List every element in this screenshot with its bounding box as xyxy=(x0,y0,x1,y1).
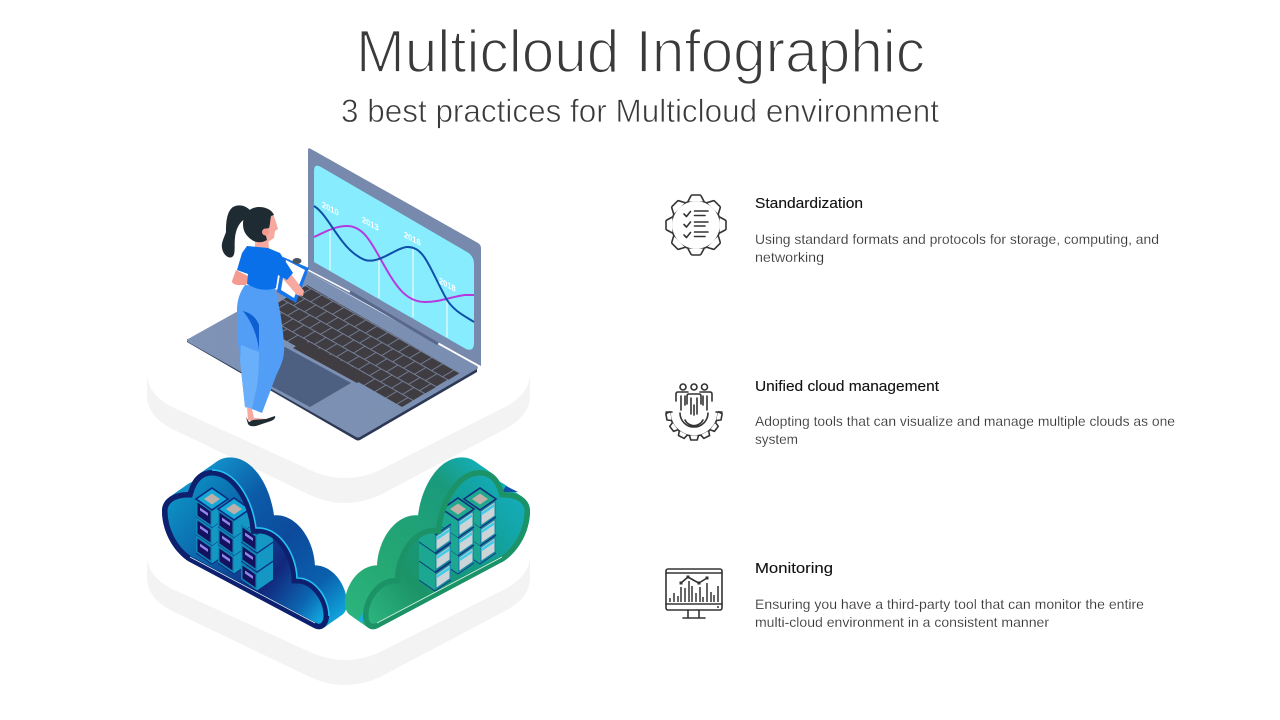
green cloud xyxy=(345,457,530,629)
blue cloud xyxy=(162,457,347,629)
upper platform xyxy=(147,373,530,503)
blue cloud rim xyxy=(162,470,329,629)
lower platform xyxy=(147,555,530,685)
blue cloud extrusion xyxy=(164,457,347,628)
chart year labels: 2010 xyxy=(322,199,339,218)
chart year labels: 2013 xyxy=(362,214,379,233)
heading: Unified cloud management xyxy=(755,378,940,395)
laptop base xyxy=(187,339,477,440)
description: Using standard formats and protocols for storage, computing, and xyxy=(755,231,1159,247)
heading: Standardization xyxy=(755,195,863,212)
cyan tip xyxy=(358,612,376,629)
item: unified cloud management xyxy=(666,378,1175,447)
legs xyxy=(237,285,284,413)
heading: Monitoring xyxy=(755,560,833,577)
space bar xyxy=(293,341,368,383)
blue servers xyxy=(196,488,273,591)
woman with clipboard xyxy=(222,205,309,426)
title: Multicloud Infographic xyxy=(356,18,925,85)
line chart xyxy=(314,206,474,337)
blue cloud face xyxy=(162,470,329,629)
description: Ensuring you have a third-party tool that can monitor the entire xyxy=(755,596,1144,612)
feet xyxy=(247,407,267,424)
ear xyxy=(262,228,269,236)
chart year labels xyxy=(322,199,456,294)
description xyxy=(755,231,1159,265)
green servers xyxy=(419,488,496,591)
green cloud extrusion xyxy=(345,457,528,628)
keyboard xyxy=(250,285,460,407)
ponytail xyxy=(222,205,250,258)
shirt xyxy=(237,246,293,290)
green cloud face xyxy=(363,470,530,629)
icon: monitor with chart xyxy=(666,569,722,618)
item: monitoring xyxy=(666,560,1144,630)
hair xyxy=(243,207,274,242)
trackpad shadow xyxy=(254,350,268,392)
green base highlight xyxy=(377,557,502,623)
icon: people on gear xyxy=(666,384,722,440)
laptop xyxy=(187,148,481,440)
description: multi-cloud environment in a consistent manner xyxy=(755,614,1049,630)
description: Adopting tools that can visualize and manage multiple clouds as one xyxy=(755,413,1175,429)
front arm xyxy=(283,274,304,296)
screen display xyxy=(314,166,474,350)
clipboard xyxy=(277,257,309,303)
description: system xyxy=(755,431,798,447)
hinge xyxy=(308,270,477,365)
back patch xyxy=(502,486,518,492)
leg shadow xyxy=(243,311,259,350)
blue rim highlight xyxy=(212,470,329,616)
laptop screen xyxy=(308,148,481,366)
subtitle: 3 best practices for Multicloud environment xyxy=(341,93,939,129)
description: networking xyxy=(755,249,824,265)
blue base highlight xyxy=(190,557,315,623)
green cloud rim xyxy=(363,470,530,629)
item: standardization xyxy=(666,195,1159,265)
icon: gear with checklist xyxy=(666,195,726,255)
back arm xyxy=(232,270,250,285)
description xyxy=(755,596,1144,630)
neck and face xyxy=(255,212,278,249)
chart year labels: 2018 xyxy=(439,275,456,294)
trackpad xyxy=(245,347,351,407)
chart year labels: 2016 xyxy=(404,229,421,248)
illustration: isometric platforms, laptop and clouds xyxy=(147,148,530,685)
description xyxy=(755,413,1175,447)
back leg highlight xyxy=(240,345,259,409)
